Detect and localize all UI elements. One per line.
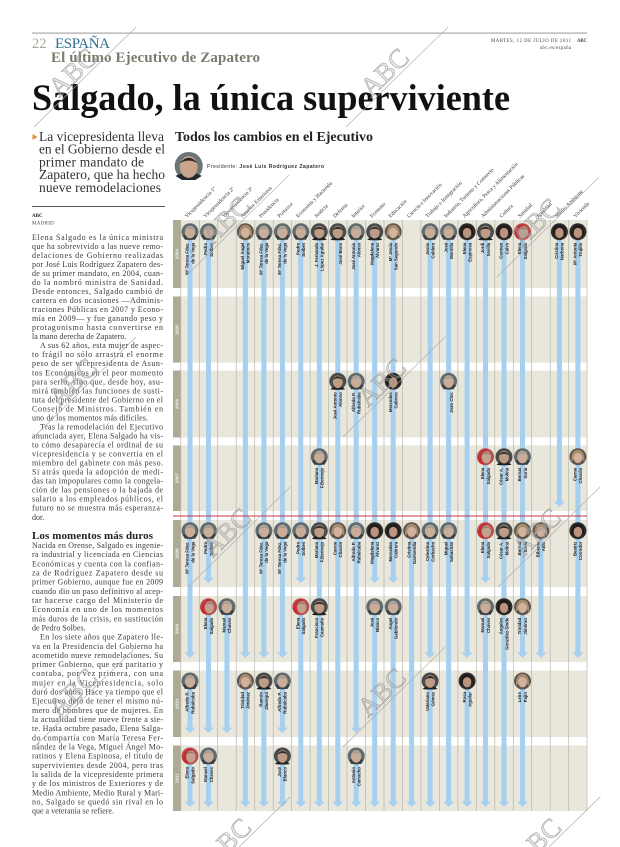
chart heading: Todos los cambios en el Ejecutivo bbox=[175, 130, 373, 145]
portraits: 2008 cabinet: Elena bbox=[480, 541, 485, 553]
ministry headers: Portavoz bbox=[277, 201, 295, 219]
portraits: 2008 cabinet: Aído bbox=[541, 541, 546, 551]
date line: abc.es/españa bbox=[540, 46, 572, 51]
portraits: 2011 changes: Blanco bbox=[283, 767, 288, 781]
watermarks: ABC bbox=[42, 352, 103, 413]
portraits: 2008 cabinet: Molina bbox=[504, 541, 509, 555]
article text: second section: Economía en uno de los momentos bbox=[32, 605, 163, 614]
byline bbox=[32, 206, 165, 226]
portraits: 2008 cabinet: de la Vega bbox=[283, 541, 288, 563]
ministry headers: Cultura bbox=[499, 203, 515, 219]
portraits: 2008 cabinet: César A. bbox=[499, 542, 504, 559]
portraits: 2004 cabinet: José Antonio bbox=[351, 242, 356, 270]
portraits: 2004 cabinet: Carmen bbox=[499, 242, 504, 259]
portraits: 2007 changes: Chacón bbox=[578, 467, 583, 483]
year labels: 2008 bbox=[174, 548, 180, 559]
ministry headers: Igualdad bbox=[536, 201, 554, 219]
portraits: 2004 cabinet: Magdalena bbox=[369, 242, 374, 265]
portraits: 2008 cabinet: Pedro bbox=[295, 541, 300, 554]
ministry headers: Interior bbox=[351, 203, 367, 219]
portraits: 2006 changes: Mercedes bbox=[388, 392, 393, 412]
portraits: 2004 cabinet: Jordi bbox=[480, 243, 485, 253]
portraits: 2008 cabinet: Pedro bbox=[203, 541, 208, 554]
article text: opening: Tras la remodelación del Ejecutivo bbox=[40, 422, 163, 431]
portraits: 2004 cabinet: Narbona bbox=[560, 242, 565, 260]
article text: second section: supervivientes desde 2004, pero tras bbox=[32, 761, 163, 770]
portraits: 2004 cabinet: de la Vega bbox=[190, 242, 195, 264]
portraits: 2010 changes: Rubalcaba bbox=[190, 691, 195, 714]
portraits: 2004 cabinet: Solbes bbox=[209, 242, 214, 257]
article text: second section: ratinos y Elena Espinosa, el título de bbox=[32, 752, 163, 761]
portraits: 2006 changes: Joan Clos bbox=[449, 392, 454, 413]
ministry headers: Vicepresidencia 1ª bbox=[184, 186, 218, 219]
portraits: 2008 cabinet: Mariano bbox=[314, 541, 319, 558]
article text: opening: de su primer mandato, en 2004, cuan- bbox=[32, 269, 163, 278]
portraits: 2004 cabinet bbox=[182, 223, 586, 275]
portraits: 2007 changes: Salgado bbox=[486, 467, 491, 484]
icon: bullet triangle bbox=[32, 134, 38, 140]
portraits: 2007 changes: F.Bermejo bbox=[320, 467, 325, 488]
article text: opening: salario a los empleados públicos, el bbox=[32, 495, 164, 504]
portraits: 2008 cabinet: Garmendia bbox=[412, 541, 417, 564]
portraits: 2008 cabinet: Salgado bbox=[486, 541, 491, 558]
article text: second section: Medio Ambiente, Medio Rural y Mari- bbox=[32, 788, 163, 797]
portraits: 2006 changes: Alfredo P. bbox=[351, 392, 356, 412]
portraits: 2004 cabinet: Calvo bbox=[504, 242, 509, 254]
portraits: 2011 changes: Camacho bbox=[357, 767, 362, 786]
portraits: 2004 cabinet: J. Fernando bbox=[314, 242, 319, 267]
portraits: 2004 cabinet: Espinosa bbox=[467, 242, 472, 262]
article text: opening: Consejo de Ministros. También en bbox=[32, 404, 163, 413]
subheading: Los momentos más duros bbox=[32, 530, 154, 542]
portraits: 2008 cabinet: de la Vega bbox=[264, 541, 269, 563]
portraits: 2009 changes: Manuel bbox=[480, 618, 485, 633]
portraits: 2008 cabinet: Corbacho bbox=[430, 541, 435, 562]
portraits: 2004 cabinet: Mª Antonia bbox=[573, 242, 578, 265]
portraits: 2007 changes: Elena bbox=[480, 467, 485, 479]
article text: opening: traciones Públicas en 2007 y Econo- bbox=[32, 305, 163, 314]
portraits: 2007 changes: Carme bbox=[573, 467, 578, 481]
article text: opening: delaciones de Gobierno realizadas bbox=[32, 251, 163, 260]
article text: second section: Nacida en Orense, Salgado es ingenie- bbox=[32, 541, 163, 550]
portraits: 2009 changes: Salgado bbox=[209, 617, 214, 634]
year labels: 2007 bbox=[174, 472, 180, 483]
portraits: 2009 changes: González-Sinde bbox=[504, 617, 509, 650]
portraits: 2007 changes: Molina bbox=[504, 467, 509, 481]
article text: opening: tuta del presidente del Gobierno en el bbox=[32, 395, 164, 404]
portraits: 2004 cabinet: Moratinos bbox=[246, 242, 251, 263]
portraits: 2006 changes: Alonso bbox=[338, 392, 343, 407]
ministry headers: Asuntos Exteriores bbox=[240, 185, 274, 219]
article text: second section: contaba, por vez primera, con una bbox=[32, 669, 163, 678]
title: Salgado, la única superviviente bbox=[32, 78, 510, 119]
year labels: 2011 bbox=[174, 773, 180, 783]
deck: primer mandato de bbox=[39, 154, 144, 169]
article text: opening: Elena Salgado es la única ministra bbox=[32, 233, 163, 242]
portraits: 2009 changes: Francisco bbox=[314, 617, 319, 638]
portraits: 2007 changes: Soria bbox=[523, 467, 528, 478]
ministry headers: Vicepresidencia 2ª bbox=[203, 186, 236, 219]
portraits: 2009 changes: Caamaño bbox=[320, 617, 325, 637]
watermarks: ABC bbox=[506, 502, 567, 563]
portraits: 2011 changes: Antonio bbox=[351, 767, 356, 783]
article text: second section: primer Gobierno, aunque fue en 2009 bbox=[32, 578, 163, 587]
portraits: 2008 cabinet: Mª Teresa Fdez. bbox=[277, 542, 282, 574]
year labels bbox=[174, 248, 180, 783]
portraits: 2010 changes: Jáuregui bbox=[264, 692, 269, 710]
portraits: 2008 cabinet: Bernat bbox=[517, 541, 522, 555]
article text: opening: miembro del gabinete con más peso. bbox=[32, 459, 163, 468]
article text: second section: acometido nueve remodelaciones. Su bbox=[32, 651, 163, 660]
portraits: 2004 cabinet: Trujillo bbox=[578, 242, 583, 257]
tenure arrows bbox=[184, 232, 583, 807]
portraits: 2008 cabinet: Beatriz bbox=[573, 542, 578, 556]
date line: ABC bbox=[577, 39, 588, 44]
watermarks: ABC bbox=[351, 662, 412, 723]
article text: opening: Si atrás queda la adopción de medi- bbox=[32, 468, 163, 477]
kicker: El último Ejecutivo de Zapatero bbox=[51, 50, 260, 66]
portraits: 2009 changes: Elena bbox=[203, 617, 208, 629]
article text: second section: va en la Presidencia del Gobierno ha bbox=[32, 642, 163, 651]
article text: opening: mirá también las funciones de susti- bbox=[32, 386, 163, 395]
ministry headers: Economía y Hacienda bbox=[295, 180, 334, 219]
article text: second section: ra industrial y licenciada en Ciencias bbox=[32, 550, 163, 559]
ministry headers: Sanidad bbox=[517, 202, 534, 219]
portraits: 2009 changes bbox=[200, 598, 531, 650]
year labels: 2009 bbox=[174, 623, 180, 634]
portraits: 2009 changes: Trinidad bbox=[517, 617, 522, 634]
president bbox=[175, 152, 324, 180]
article text: opening: para serlo, sino que, desde hoy, asu- bbox=[32, 377, 163, 386]
portraits: 2004 cabinet: Pedro bbox=[203, 242, 208, 255]
article text: second section: primer Gobierno, que era paritario y bbox=[32, 660, 163, 669]
article text: opening: das tan impopulares como la congela- bbox=[32, 477, 163, 486]
portraits: 2010 changes: Gómez bbox=[430, 692, 435, 706]
deck: nueve remodelaciones bbox=[39, 180, 161, 195]
portraits: 2010 changes: Pajín bbox=[523, 692, 528, 702]
portraits: 2008 cabinet: Álvarez bbox=[375, 542, 380, 557]
ministry headers: Trabajo e Inmigración bbox=[425, 180, 464, 219]
article text: opening: vicepresidencia y se convertía en el bbox=[32, 450, 164, 458]
article text: opening: cartera en dos ocasiones —Adminis- bbox=[32, 296, 163, 305]
portraits: 2004 cabinet: Miguel Ángel bbox=[240, 243, 245, 269]
portraits: 2010 changes: Alfredo P. bbox=[277, 692, 282, 712]
portraits: 2004 cabinet: Elena bbox=[517, 242, 522, 254]
article text: second section: que a veteranía se refiere. bbox=[32, 807, 114, 816]
article text: opening: to cómo desaparecía el ordinal de su bbox=[32, 440, 163, 450]
portraits: 2009 changes: Chaves bbox=[227, 617, 232, 633]
portraits: 2004 cabinet: Mª Teresa Fdez. bbox=[277, 243, 282, 275]
portraits: 2010 changes: Ramón bbox=[259, 692, 264, 707]
portraits: 2004 cabinet: Mª Teresa Fdez. bbox=[259, 243, 264, 275]
article text: second section: no, Salgado se quedó sin rival en lo bbox=[32, 798, 163, 806]
ministry headers: Agricultura, Pesca y Alimentación bbox=[462, 161, 520, 219]
portraits: 2009 changes: Blanco bbox=[375, 617, 380, 632]
portraits: 2004 cabinet: de la Vega bbox=[283, 242, 288, 264]
portraits: 2008 cabinet: Bibiana bbox=[536, 541, 541, 557]
ministry headers: Administraciones Públicas bbox=[480, 174, 526, 219]
portraits: 2008 cabinet: Mª Teresa Fdez. bbox=[259, 542, 264, 574]
article text: opening: peso de ser vicepresidenta de Asun- bbox=[32, 359, 163, 368]
portraits: 2006 changes: José Antonio bbox=[332, 392, 337, 419]
portraits: 2004 cabinet: Alonso bbox=[357, 242, 362, 257]
portraits: 2008 cabinet: Celestino bbox=[425, 541, 430, 561]
year labels: 2004 bbox=[174, 248, 180, 259]
watermarks: ABC bbox=[195, 190, 256, 251]
article text: second section: do compartía con María Teresa Fer- bbox=[32, 733, 163, 742]
deck: Zapatero, que ha hecho bbox=[39, 167, 165, 182]
article text: opening: dor. bbox=[32, 513, 44, 522]
portraits: 2007 changes bbox=[311, 448, 586, 488]
article text: second section: más duros de la crisis, en sustitución bbox=[32, 614, 163, 623]
portraits: 2004 cabinet: de la Vega bbox=[264, 242, 269, 264]
portraits: 2008 cabinet: Cristina bbox=[406, 541, 411, 558]
portraits: 2004 cabinet: José bbox=[443, 242, 448, 252]
article text: second section: En los siete años que Zapatero lle- bbox=[40, 633, 163, 642]
top rule bbox=[32, 32, 587, 34]
portraits: 2011 changes: José bbox=[277, 766, 282, 777]
article text: second section: za de Rodríguez Zapatero desde su bbox=[32, 568, 163, 578]
portraits: 2009 changes: Gabilondo bbox=[394, 617, 399, 639]
ministry headers: Industria, Turismo y Comercio bbox=[443, 167, 496, 219]
ministry headers: Defensa bbox=[331, 201, 350, 219]
icon: Zapatero portrait bbox=[175, 152, 203, 180]
article text: second section: y de los ministros de Exteriores y de bbox=[32, 779, 163, 788]
government change line bbox=[173, 516, 587, 517]
portraits: 2009 changes: José bbox=[369, 617, 374, 627]
portraits: 2008 cabinet: Miguel bbox=[443, 542, 448, 555]
ministry headers: Fomento bbox=[369, 201, 387, 219]
article text: second section: la salida de la vicepresidente primera bbox=[32, 770, 163, 779]
portraits: 2009 changes: Elena bbox=[295, 617, 300, 629]
article text: opening: to frágil no sólo arrastra el enorme bbox=[32, 350, 163, 359]
portraits: 2011 changes: Elena bbox=[185, 766, 190, 778]
deck: La vicepresidenta lleva bbox=[39, 129, 164, 144]
portraits: 2009 changes: Manuel bbox=[222, 618, 227, 633]
watermarks: ABC bbox=[354, 42, 415, 103]
ministry headers: Presidencia bbox=[258, 197, 281, 219]
portraits: 2010 changes: Jiménez bbox=[246, 692, 251, 709]
portraits: 2008 cabinet: Rubalcaba bbox=[357, 541, 362, 563]
portraits: 2008 cabinet: Alfredo P. bbox=[351, 542, 356, 561]
portraits: 2004 cabinet: Álvarez bbox=[375, 243, 380, 258]
article text: second section: tar hacerse cargo del Ministerio de bbox=[32, 596, 163, 605]
article text: opening: por José Luis Rodríguez Zapatero des- bbox=[32, 260, 163, 269]
article text: second section bbox=[32, 541, 164, 816]
portraits: 2004 cabinet: Mª Teresa Fdez. bbox=[185, 243, 190, 275]
portraits: 2010 changes bbox=[182, 672, 531, 714]
portraits: 2004 cabinet: Pedro bbox=[295, 242, 300, 255]
portraits: 2009 changes: Ángeles bbox=[499, 617, 504, 634]
portraits: 2004 cabinet: Jesús bbox=[425, 242, 430, 255]
portraits: 2010 changes: Alfredo P. bbox=[185, 692, 190, 712]
year labels: 2010 bbox=[174, 698, 180, 709]
portraits: 2008 cabinet: Carme bbox=[332, 541, 337, 555]
article text: opening: uno de los momentos más difíciles. bbox=[32, 413, 148, 422]
deck bbox=[32, 129, 165, 195]
article text: second section: duró dos años. Hace ya tiempo que el bbox=[32, 688, 164, 697]
portraits: 2008 cabinet: F.Bermejo bbox=[320, 541, 325, 562]
deck: en el Gobierno desde el bbox=[39, 142, 165, 157]
byline: ABC bbox=[32, 214, 43, 219]
article text: second section: de Pedro Solbes. bbox=[32, 623, 86, 632]
article text: second section: Económicas y cuenta con la confian- bbox=[32, 559, 163, 568]
article text: opening: Desde entonces, Salgado cambió de bbox=[32, 287, 163, 296]
portraits: 2006 changes bbox=[329, 373, 457, 419]
article text: opening bbox=[32, 233, 164, 522]
portraits: 2011 changes bbox=[182, 748, 365, 786]
article text: opening: mía en 2009— y fue ganando peso y bbox=[32, 314, 163, 323]
date line bbox=[491, 39, 588, 51]
portraits: 2009 changes: Ángel bbox=[388, 618, 393, 630]
article text: second section: nández de la Vega, Miguel Ángel Mo- bbox=[32, 742, 163, 752]
article text: opening: tos Económicos en el peor momento bbox=[32, 368, 163, 377]
ministry headers bbox=[184, 161, 591, 219]
portraits: 2006 changes: Rubalcaba bbox=[357, 392, 362, 414]
portraits: 2007 changes: César A. bbox=[499, 468, 504, 485]
portraits: 2004 cabinet: Sevilla bbox=[486, 242, 491, 256]
portraits: 2008 cabinet: Soria bbox=[523, 541, 528, 552]
portraits: 2004 cabinet: López Aguilar bbox=[320, 242, 325, 271]
portraits: 2004 cabinet: Mª Jesús bbox=[388, 242, 393, 261]
portraits: 2004 cabinet: Caldera bbox=[430, 242, 435, 258]
portraits: 2010 changes: Rosa bbox=[462, 691, 467, 703]
portraits: 2009 changes: Salgado bbox=[301, 617, 306, 634]
portraits: 2008 cabinet: Chacón bbox=[338, 541, 343, 557]
date line: MARTES, 12 DE JULIO DE 2011 bbox=[491, 39, 572, 44]
ministry headers: Vicepresidencia 3ª bbox=[221, 186, 255, 219]
section label: ESPAÑA bbox=[55, 36, 110, 52]
watermarks: ABC bbox=[42, 42, 103, 103]
portraits: 2011 changes: Chaves bbox=[209, 766, 214, 782]
portraits: 2009 changes: Jiménez bbox=[523, 618, 528, 635]
portraits: 2008 cabinet: de la Vega bbox=[190, 541, 195, 563]
year labels: 2005 bbox=[174, 324, 180, 335]
watermarks: ABC bbox=[505, 192, 566, 253]
portraits: 2008 cabinet: Mercedes bbox=[388, 541, 393, 562]
article text: opening: anunciada ayer, Elena Salgado ha vis- bbox=[32, 432, 163, 440]
portraits: 2008 cabinet bbox=[182, 522, 586, 574]
portraits: 2010 changes: Aguilar bbox=[467, 692, 472, 707]
portraits: 2004 cabinet: Salgado bbox=[523, 242, 528, 259]
year labels: 2006 bbox=[174, 398, 180, 409]
article text: opening: ción de las pensiones o la bajada de bbox=[32, 486, 163, 495]
portraits: 2008 cabinet: Mª Teresa Fdez. bbox=[185, 542, 190, 574]
watermarks: ABC bbox=[351, 352, 412, 413]
ministry headers: Vivienda bbox=[573, 201, 591, 219]
portraits: 2008 cabinet: Cabrera bbox=[394, 541, 399, 558]
portraits: 2009 changes: Chaves bbox=[486, 617, 491, 633]
article text: opening: que ha sobrevivido a las nueve remo- bbox=[32, 242, 163, 251]
article text: second section: mujer en la Vicepresidencia, solo bbox=[32, 678, 163, 687]
portraits: 2010 changes: Trinidad bbox=[240, 692, 245, 709]
page number: 22 bbox=[32, 36, 46, 52]
timeline panel background bbox=[173, 220, 587, 811]
portraits: 2010 changes: Rubalcaba bbox=[283, 691, 288, 714]
president: Presidente: José Luis Rodríguez Zapatero bbox=[207, 164, 324, 170]
portraits: 2006 changes: Cabrera bbox=[394, 392, 399, 409]
portraits: 2011 changes: Salgado bbox=[190, 767, 195, 784]
portraits: 2010 changes: Leire bbox=[517, 691, 522, 702]
portraits: 2004 cabinet: San Segundo bbox=[394, 242, 399, 270]
ministry headers: Ciencia e Innovación bbox=[406, 182, 444, 219]
portraits: 2004 cabinet: Solbes bbox=[301, 242, 306, 257]
portraits: 2007 changes: Mariano bbox=[314, 467, 319, 484]
portraits: 2004 cabinet: Elena bbox=[462, 242, 467, 254]
ministry headers: Medio Ambiente bbox=[554, 189, 585, 219]
portraits: 2011 changes: Manuel bbox=[203, 767, 208, 782]
portraits: 2008 cabinet: Sebastián bbox=[449, 541, 454, 562]
portraits: 2008 cabinet: Solbes bbox=[301, 541, 306, 556]
article text: opening: la mano derecha de Zapatero. bbox=[32, 332, 126, 341]
portraits: 2004 cabinet: Cristina bbox=[554, 242, 559, 259]
article text: second section: Ejecutivo dejó de tener el mismo nú- bbox=[32, 697, 163, 706]
portraits: 2007 changes: Bernat bbox=[517, 467, 522, 481]
article text: opening: protagonismo hasta convertirse en bbox=[32, 323, 163, 332]
article text: opening: do la nombró ministra de Sanidad. bbox=[32, 278, 163, 287]
article text: opening: A sus 62 años, esta mujer de aspec- bbox=[40, 341, 163, 350]
article text: second section: la actualidad tiene nueve frente a sie- bbox=[32, 715, 163, 724]
article text: second section: cuando dio un paso definitivo al acep- bbox=[32, 587, 163, 596]
article text: second section: mero de hombres que de mujeres. En bbox=[32, 706, 163, 715]
portraits: 2008 cabinet: Magdalena bbox=[369, 541, 374, 564]
watermarks: ABC bbox=[42, 662, 103, 723]
ministry headers: Educación bbox=[388, 199, 409, 219]
portraits: 2004 cabinet: José Bono bbox=[338, 242, 343, 265]
article text: opening: futuro no se muestra más esperanza- bbox=[32, 504, 163, 513]
watermarks: ABC bbox=[196, 502, 257, 563]
portraits: 2010 changes: Valeriano bbox=[425, 692, 430, 711]
ministry headers: Justicia bbox=[314, 203, 330, 219]
portraits: 2004 cabinet: Montilla bbox=[449, 242, 454, 259]
portraits: 2008 cabinet: Corredor bbox=[578, 541, 583, 560]
byline: MADRID bbox=[32, 222, 54, 226]
portraits: 2008 cabinet: Solbes bbox=[209, 541, 214, 556]
article text: second section: te. Hasta octubre pasado, Elena Salga- bbox=[32, 724, 163, 733]
